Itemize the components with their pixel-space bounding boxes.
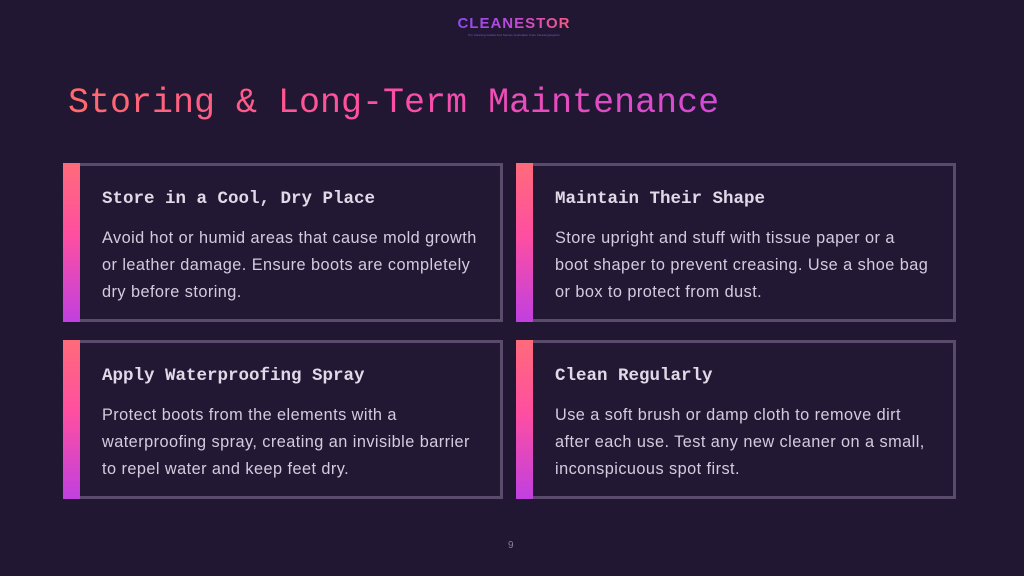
body text: Use a soft brush or damp cloth to remove dirt: [555, 406, 901, 424]
body text: inconspicuous spot first.: [555, 460, 740, 478]
body text: after each use. Test any new cleaner on a small,: [555, 433, 925, 451]
body text: or box to protect from dust.: [555, 283, 762, 301]
title: Storing & Long-Term Maintenance: [68, 83, 719, 123]
heading: Store in a Cool, Dry Place: [102, 189, 375, 209]
body text: [555, 406, 925, 478]
body text: waterproofing spray, creating an invisible barrier: [102, 433, 470, 451]
page number: 9: [508, 540, 514, 551]
body text: Avoid hot or humid areas that cause mold growth: [102, 229, 477, 247]
body text: Store upright and stuff with tissue paper or a: [555, 229, 895, 247]
heading: Apply Waterproofing Spray: [102, 366, 365, 386]
panel: maintain their shape: [516, 163, 956, 322]
body text: or leather damage. Ensure boots are completely: [102, 256, 470, 274]
body text: boot shaper to prevent creasing. Use a shoe bag: [555, 256, 928, 274]
body text: dry before storing.: [102, 283, 242, 301]
panel: clean regularly: [516, 340, 956, 499]
heading: Clean Regularly: [555, 366, 713, 386]
logo: CLEANESTOR: [457, 15, 571, 32]
body text: [555, 229, 928, 301]
body text: Protect boots from the elements with a: [102, 406, 397, 424]
panel: apply waterproofing spray: [63, 340, 503, 499]
body text: [102, 406, 470, 478]
body text: to repel water and keep feet dry.: [102, 460, 349, 478]
logo: Pro Cleaning Guides And Service Journalism From Cleaning Experts: [468, 33, 560, 37]
panel: store in a cool dry place: [63, 163, 503, 322]
heading: Maintain Their Shape: [555, 189, 765, 209]
body text: [102, 229, 477, 301]
